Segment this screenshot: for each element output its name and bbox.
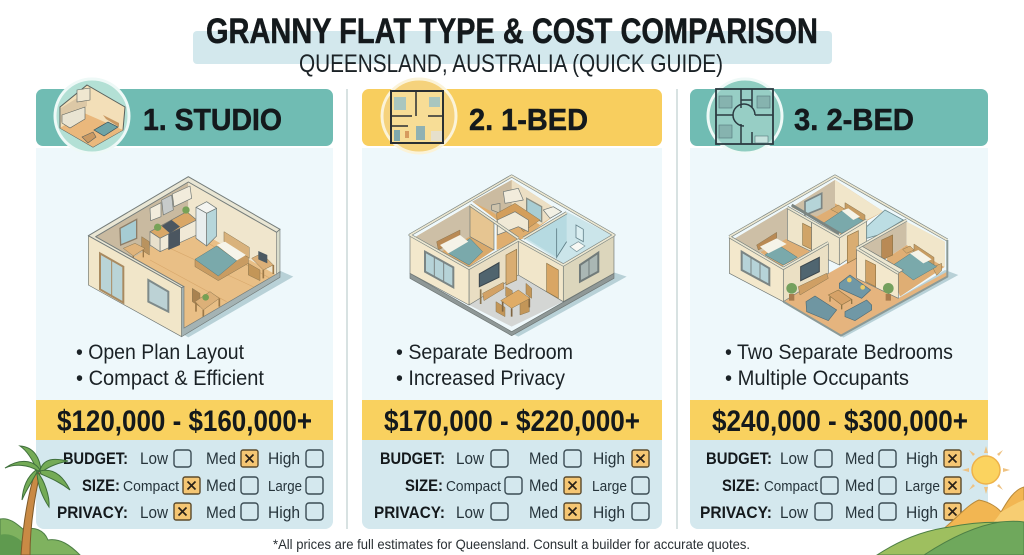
rating: privacy: High	[906, 503, 938, 522]
illustration: palm tree and bush	[0, 446, 80, 555]
rating: size: Med	[206, 476, 236, 495]
rating: privacy: Low	[456, 503, 485, 522]
rating: size: Compact	[123, 479, 179, 495]
2-bed features: • Multiple Occupants	[725, 367, 909, 390]
rating: budget: High	[906, 449, 938, 468]
bedroom	[416, 205, 494, 267]
2-bed heading: 3. 2-BED	[794, 102, 914, 137]
1-bed heading: 2. 1-BED	[469, 102, 588, 137]
panel: 2-bed	[690, 79, 988, 529]
icon: sun	[962, 446, 1010, 494]
tv	[479, 263, 499, 287]
dining set	[496, 283, 532, 317]
left window	[742, 252, 769, 285]
bush	[0, 519, 80, 555]
inner wall end	[857, 246, 903, 273]
rating: size	[722, 476, 961, 495]
tv	[801, 257, 819, 281]
interior door	[506, 249, 517, 285]
bedroom right	[862, 222, 945, 297]
kitchen	[472, 180, 560, 250]
studio features: • Compact & Efficient	[76, 367, 264, 390]
rating: privacy: Med	[845, 503, 874, 522]
price strip: $120,000 - $160,000+	[57, 405, 312, 438]
bedroom left	[735, 207, 810, 267]
illustration: studio isometric	[88, 177, 293, 337]
kitchen units	[150, 206, 197, 252]
wall with doors	[787, 207, 867, 265]
rating: privacy	[374, 503, 649, 522]
rating: privacy: PRIVACY:	[374, 503, 445, 522]
rating: budget: Low	[140, 449, 169, 468]
rating: privacy	[700, 503, 961, 522]
rating: privacy: Med	[206, 503, 236, 522]
rating: privacy: PRIVACY:	[700, 503, 772, 522]
desk	[248, 251, 273, 281]
fridge	[196, 202, 217, 246]
panel background	[690, 148, 988, 529]
price strip: $240,000 - $300,000+	[712, 405, 968, 438]
living back walls	[469, 240, 518, 305]
panel background	[36, 148, 333, 529]
left outer wall	[729, 237, 783, 302]
front wall	[88, 236, 182, 337]
rating: budget: Med	[206, 449, 236, 468]
rating: budget	[706, 449, 961, 468]
inner door	[866, 260, 876, 287]
rating: size: SIZE:	[405, 476, 443, 495]
1-bed header bar	[362, 89, 662, 146]
rating: privacy: High	[268, 503, 300, 522]
bathroom	[523, 212, 612, 263]
rating: budget: High	[593, 449, 625, 468]
panel background	[362, 148, 662, 529]
rating: budget: High	[268, 449, 300, 468]
dining table	[123, 237, 149, 262]
2-bed features: • Two Separate Bedrooms	[725, 341, 953, 364]
rating: size: Large	[592, 479, 627, 495]
rating: size: Med	[529, 476, 558, 495]
bathroom glass	[867, 210, 903, 238]
rating: budget: Low	[780, 449, 809, 468]
illustration: 1-bed isometric	[410, 176, 627, 337]
rating: privacy: PRIVACY:	[57, 503, 128, 522]
rating: budget: Med	[529, 449, 558, 468]
upper cabinets and hood	[150, 186, 192, 221]
studio heading: 1. STUDIO	[143, 102, 282, 137]
2-bed header bar	[690, 89, 988, 146]
living floor	[469, 275, 563, 327]
left outer wall	[410, 235, 469, 305]
rating: budget: Med	[845, 449, 874, 468]
title banner	[193, 12, 832, 64]
rating: privacy: Med	[529, 503, 558, 522]
right outer wall	[563, 235, 614, 302]
plants	[786, 283, 894, 301]
wall top edges	[729, 176, 947, 273]
rating: privacy: High	[593, 503, 625, 522]
1-bed features: • Separate Bedroom	[396, 341, 573, 364]
wall top edges	[410, 176, 614, 268]
studio features: • Open Plan Layout	[76, 341, 244, 364]
rating table background	[36, 440, 333, 529]
rating table background	[362, 440, 662, 529]
rating: size: Large	[268, 479, 302, 495]
rating: size	[82, 476, 323, 495]
rating: size: Med	[845, 476, 874, 495]
rating: budget: BUDGET:	[706, 449, 772, 468]
subtitle: QUEENSLAND, AUSTRALIA (QUICK GUIDE)	[299, 50, 723, 78]
tv wall	[783, 243, 828, 302]
wall top edge	[88, 177, 280, 288]
rating: budget: BUDGET:	[63, 449, 128, 468]
rating: budget	[63, 449, 323, 468]
1-bed features: • Increased Privacy	[396, 367, 565, 390]
icon: 2-bed floor plan badge	[708, 79, 782, 153]
rating: budget: BUDGET:	[380, 449, 445, 468]
living room furniture	[806, 275, 872, 321]
rating: budget	[380, 449, 649, 468]
rating: size: SIZE:	[722, 476, 760, 495]
side table	[192, 288, 219, 317]
rating: privacy	[57, 503, 323, 522]
right window	[580, 253, 598, 282]
rating: size: SIZE:	[82, 476, 120, 495]
footnote: *All prices are full estimates for Queensland. Consult a builder for accurate quotes.	[273, 536, 750, 552]
inner wall right	[857, 248, 898, 298]
door to bathroom	[547, 263, 558, 298]
studio header bar	[36, 89, 333, 146]
front window	[148, 280, 168, 312]
rating: size: Large	[905, 479, 940, 495]
whole floor	[784, 257, 947, 336]
rating table background	[690, 440, 988, 529]
sideboard	[481, 282, 504, 304]
1-bed features	[396, 341, 573, 390]
tv unit	[798, 273, 828, 295]
fronds	[5, 446, 70, 507]
door	[100, 253, 123, 303]
2-bed features	[725, 341, 953, 390]
price strip: $170,000 - $220,000+	[384, 405, 640, 438]
bedroom back	[792, 180, 883, 235]
bed	[195, 232, 249, 281]
left window	[425, 252, 453, 287]
rating: size: Compact	[446, 479, 501, 495]
illustration: 2-bed isometric	[729, 176, 958, 338]
rating: budget: Low	[456, 449, 485, 468]
back window	[120, 219, 137, 245]
studio features	[76, 341, 264, 390]
rating: size	[405, 476, 649, 495]
icon: 1-bed floor plan badge	[382, 79, 456, 153]
panel: 1-bed	[362, 79, 662, 529]
icon: studio badge	[55, 79, 129, 153]
title: GRANNY FLAT TYPE & COST COMPARISON	[206, 12, 818, 51]
illustration: hills	[877, 487, 1024, 555]
rating: privacy: Low	[140, 503, 169, 522]
panel: studio	[36, 79, 333, 529]
rating: privacy: Low	[780, 503, 809, 522]
column dividers	[347, 89, 677, 529]
trunk	[21, 472, 40, 555]
rating: size: Compact	[764, 479, 818, 495]
